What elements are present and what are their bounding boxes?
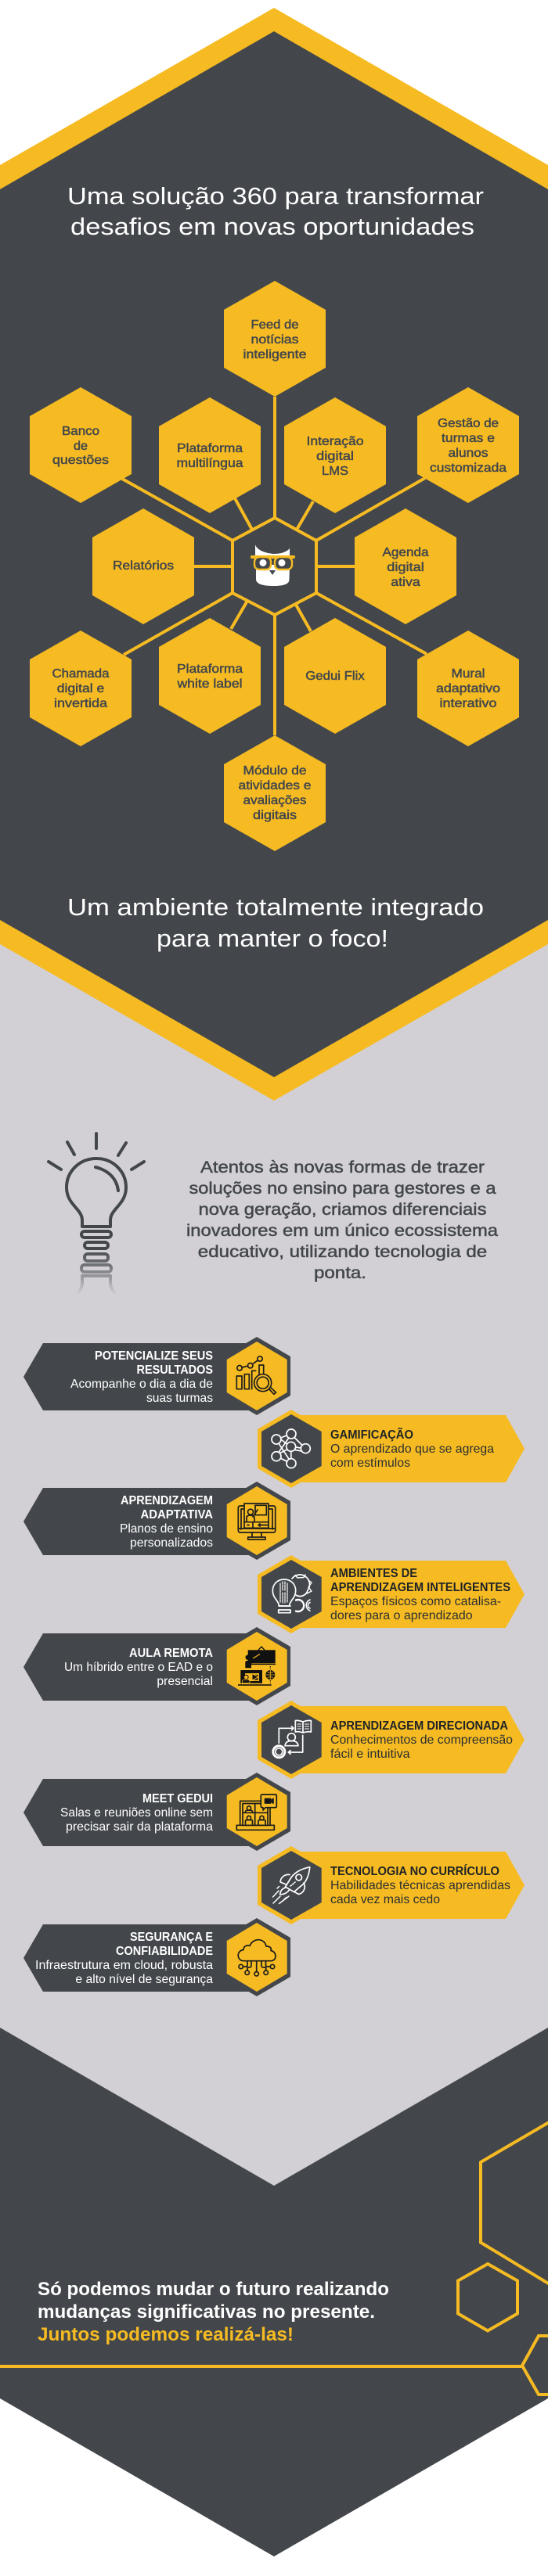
hexagon: Feed de notícias inteligente: inteligente [243,348,307,361]
item: Potencialize seus resultados: POTENCIALIZE SEUS [95,1349,213,1363]
top dark panel [0,31,548,1077]
item: Meet Gedui [23,1773,290,1851]
item: Tecnologia no currículo: Habilidades técnicas aprendidas [330,1879,510,1892]
intro paragraph: nova geração, criamos diferenciais [199,1200,487,1219]
hexagon: Relatórios: Relatórios [113,559,174,573]
icon: light bulb [49,1134,144,1295]
item: Potencialize seus resultados: RESULTADOS [136,1363,213,1377]
intro paragraph: inovadores em um único ecossistema [186,1221,498,1240]
hexagon: Interação digital LMS [284,397,386,513]
hexagon: Interação digital LMS: digital [316,450,354,463]
central hexagon with owl logo [233,518,316,615]
hexagon: Módulo de atividades e avaliações digitais: avaliações [243,794,307,807]
hexagon: Gedui Flix [284,618,386,734]
hexagon: Gestão de turmas e alunos customizada: customizada [430,462,507,475]
closing statement: mudanças significativas no presente. [38,2301,375,2323]
intro paragraph [186,1158,498,1282]
closing heading of top panel: para manter o foco! [157,925,388,952]
item: Gamificação: O aprendizado que se agrega [330,1442,494,1456]
bottom dark panel [0,2028,548,2556]
hexagon: Módulo de atividades e avaliações digitais: atividades e [238,779,312,792]
item: Ambientes de aprendizagem inteligentes: AMBIENTES DE [330,1567,417,1580]
hexagon: Gestão de turmas e alunos customizada: turmas e [442,432,495,445]
icon: book, learner and gear [273,1720,311,1758]
icon: rocket [272,1867,310,1904]
hexagon: Mural adaptativo interativo [417,631,519,746]
item: Aprendizagem adaptativa: personalizados [130,1536,213,1550]
hexagon: Banco de questões: de [74,440,88,453]
hexagon: Mural adaptativo interativo: Mural [451,667,485,681]
connector lines of the hub [122,397,427,735]
hexagon: Chamada digital e invertida: digital e [57,682,104,695]
closing statement [38,2279,389,2345]
item: Aprendizagem direcionada: APRENDIZAGEM DIRECIONADA [330,1719,508,1733]
closing statement: Juntos podemos realizá-las! [38,2324,294,2345]
hexagon: Feed de notícias inteligente [224,281,326,397]
item: Gamificação: com estímulos [330,1457,410,1470]
item: Aula remota: Um híbrido entre o EAD e o [64,1661,213,1674]
item: Potencialize seus resultados: suas turmas [146,1392,213,1405]
item: Aprendizagem direcionada [258,1701,525,1779]
item: Tecnologia no currículo [258,1846,525,1924]
item: Aula remota [23,1627,290,1705]
item: Ambientes de aprendizagem inteligentes: dores para o aprendizado [330,1609,473,1622]
item: Ambientes de aprendizagem inteligentes: Espaços físicos como catalisa- [330,1595,501,1608]
hexagon: Plataforma multilíngua: multilíngua [177,457,243,470]
item: Segurança e confiabilidade: SEGURANÇA E [130,1931,213,1944]
item: Aula remota: AULA REMOTA [129,1647,213,1660]
closing statement: Só podemos mudar o futuro realizando [38,2279,389,2300]
item: Aprendizagem direcionada: Conhecimentos de compreensão [330,1734,513,1747]
hexagon: Interação digital LMS: LMS [322,465,348,478]
item: Gamificação [258,1410,525,1488]
hexagon: Agenda digital ativa: Agenda [382,546,429,559]
hexagon: Agenda digital ativa [355,508,456,624]
icon: video meeting laptop [236,1795,276,1830]
icon: cloud with circuit [238,1940,276,1976]
title: Uma solução 360 para transformar [67,182,484,210]
hexagon: Chamada digital e invertida [30,631,132,746]
decorative small hexagon outline [458,2264,517,2331]
icon: teacher at board and laptop [238,1647,276,1686]
item: Meet Gedui: precisar sair da plataforma [66,1820,213,1834]
horizontal line with hexagon [0,2336,548,2395]
intro paragraph: ponta. [314,1263,366,1282]
hexagon: Gestão de turmas e alunos customizada: Gestão de [438,417,499,430]
icon: network nodes [272,1429,310,1468]
hexagon: Relatórios [92,508,194,624]
hexagon: Gedui Flix: Gedui Flix [305,670,365,683]
intro paragraph: soluções no ensino para gestores e a [189,1179,496,1198]
item: Gamificação: GAMIFICAÇÃO [330,1426,413,1442]
hexagon: Plataforma white label: white label [176,677,243,691]
title: desafios em novas oportunidades [70,213,474,240]
item: Ambientes de aprendizagem inteligentes: APRENDIZAGEM INTELIGENTES [330,1581,510,1594]
hexagon: Módulo de atividades e avaliações digitais: digitais [253,809,297,822]
title [67,182,484,240]
item: Potencialize seus resultados [23,1337,290,1415]
icon: bulb and gears [272,1575,312,1613]
hexagon: Banco de questões: Banco [62,425,99,438]
hexagon: Agenda digital ativa: ativa [391,576,420,589]
closing heading of top panel: Um ambiente totalmente integrado [67,893,484,921]
hexagon: Chamada digital e invertida: Chamada [52,667,110,681]
hexagon: Plataforma multilíngua [159,397,261,513]
icon: monitor with teacher [238,1504,276,1539]
item: Ambientes de aprendizagem inteligentes [258,1555,525,1633]
gray background section [0,860,548,2190]
hexagon: Plataforma multilíngua: Plataforma [177,442,243,455]
item: Segurança e confiabilidade [23,1918,290,1996]
item: Tecnologia no currículo: cada vez mais cedo [330,1893,440,1906]
hexagon: Feed de notícias inteligente: notícias [251,333,299,347]
item: Meet Gedui: Salas e reuniões online sem [60,1806,213,1820]
decorative large hexagon outline [481,2122,548,2284]
item: Aprendizagem direcionada: fácil e intuitiva [330,1748,410,1761]
item: Aprendizagem adaptativa [23,1482,290,1560]
item: Potencialize seus resultados: Acompanhe o dia a dia de [70,1378,213,1391]
hexagon: Plataforma white label: Plataforma [177,663,243,676]
top yellow border shape [0,8,548,1101]
hexagon: Gestão de turmas e alunos customizada: alunos [448,447,489,460]
item: Aprendizagem adaptativa: APRENDIZAGEM [121,1494,213,1507]
hexagon: Módulo de atividades e avaliações digitais [224,735,326,851]
item: Aprendizagem adaptativa: Planos de ensino [120,1522,213,1536]
hexagon: Banco de questões [30,387,132,503]
icon: owl with glasses [251,544,295,586]
closing heading of top panel [67,893,484,952]
hexagon: Chamada digital e invertida: invertida [54,697,107,710]
hexagon: Mural adaptativo interativo: interativo [440,697,497,710]
icon: chart and magnifier [236,1356,276,1394]
hexagon: Banco de questões: questões [52,454,109,467]
item: Tecnologia no currículo: TECNOLOGIA NO CURRÍCULO [330,1863,499,1878]
intro paragraph: educativo, utilizando tecnologia de [198,1242,487,1261]
item: Segurança e confiabilidade: CONFIABILIDADE [116,1945,213,1958]
hexagon: Agenda digital ativa: digital [387,561,424,574]
item: Segurança e confiabilidade: Infraestrutura em cloud, robusta [35,1959,213,1972]
intro paragraph: Atentos às novas formas de trazer [200,1158,485,1177]
hexagon: Feed de notícias inteligente: Feed de [251,318,299,332]
hexagon: Gestão de turmas e alunos customizada [417,387,519,503]
hexagon: Mural adaptativo interativo: adaptativo [436,682,500,695]
hexagon: Módulo de atividades e avaliações digitais: Módulo de [243,764,307,778]
hexagon: Interação digital LMS: Interação [307,435,364,448]
item: Aula remota: presencial [157,1675,213,1688]
item: Meet Gedui: MEET GEDUI [142,1792,213,1805]
item: Segurança e confiabilidade: e alto nível de segurança [75,1973,213,1986]
item: Aprendizagem adaptativa: ADAPTATIVA [141,1508,213,1522]
hexagon: Plataforma white label [159,618,261,734]
